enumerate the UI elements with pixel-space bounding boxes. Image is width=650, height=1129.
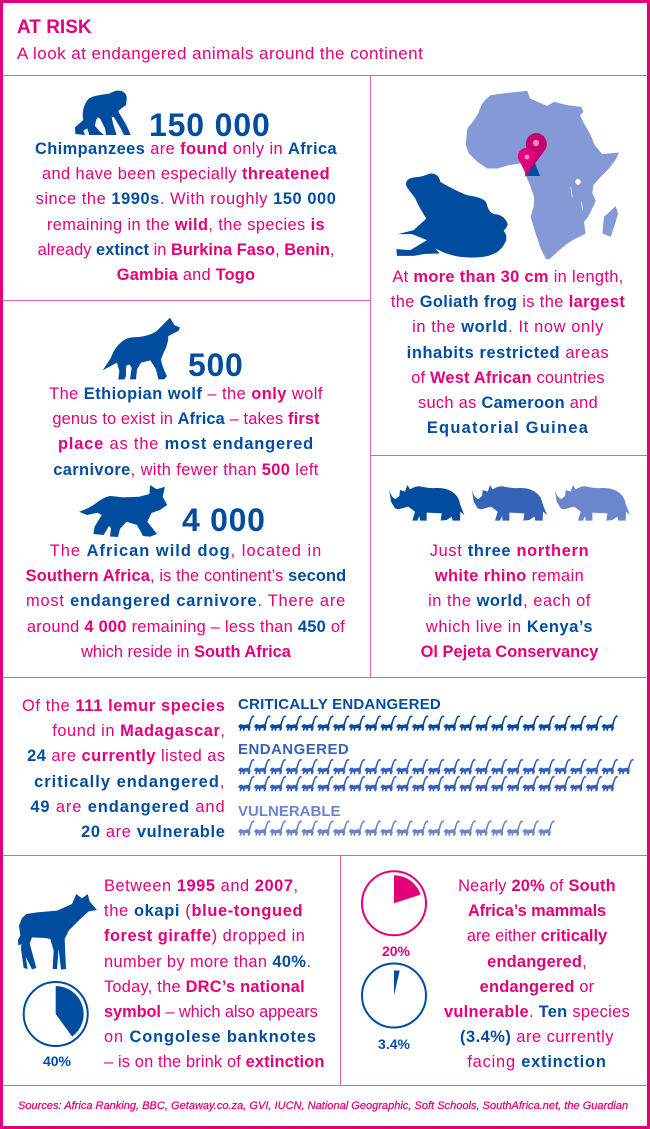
text: African wild dog: Southern Africa, is the continent’s second <box>26 567 346 585</box>
text: rhino: in the world, each of <box>428 592 591 610</box>
text: lemurs: Of the 111 lemur species <box>22 697 226 715</box>
text: mammals: Africa’s mammals <box>468 902 606 920</box>
text: Goliath frog: Equatorial Guinea <box>427 419 589 437</box>
text: okapi: symbol – which also appears <box>104 1003 318 1021</box>
text: lemurs: 20 are vulnerable <box>81 823 226 841</box>
panel: Goliath frog <box>391 90 625 437</box>
text: okapi: on Congolese banknotes <box>104 1028 317 1046</box>
pictogram: 24 critically endangered lemurs <box>238 715 618 731</box>
text: rhino: Ol Pejeta Conservancy <box>421 643 598 661</box>
text: mammals: are either critically <box>467 927 607 945</box>
text: mammals: endangered or <box>480 978 594 996</box>
panel: lemurs <box>22 696 634 841</box>
pictogram: 49 endangered lemurs <box>238 759 634 791</box>
label: critically endangered: CRITICALLY ENDANGERED <box>238 696 441 713</box>
panel: okapi <box>18 877 325 1071</box>
text: rhino: white rhino remain <box>435 567 584 585</box>
text: chimpanzees: and have been especially threatened <box>42 165 330 183</box>
text: African wild dog: which reside in South Africa <box>81 643 291 661</box>
text: chimpanzees: Chimpanzees are found only in Africa <box>35 140 337 158</box>
text: African wild dog <box>26 542 346 661</box>
stat: 4 000: 4 000 <box>182 502 266 538</box>
chart: 20% pie <box>361 870 427 936</box>
text: Goliath frog <box>391 268 625 437</box>
panel: wolves and wild dogs <box>26 318 346 661</box>
panel: chimpanzees <box>35 90 337 284</box>
icon: Goliath frog <box>396 174 508 258</box>
text: okapi: number by more than 40%. <box>104 953 311 971</box>
legend: lemur icon rows <box>238 715 634 836</box>
map: Africa <box>466 90 619 260</box>
text: chimpanzees: already extinct in Burkina Faso, Benin, <box>38 241 334 259</box>
subtitle: A look at endangered animals around the continent <box>17 44 423 63</box>
text: African wild dog: The African wild dog, located in <box>50 542 322 560</box>
chart: 3.4% pie <box>361 962 427 1028</box>
label: vulnerable: VULNERABLE <box>238 803 341 820</box>
text: lemurs: found in Madagascar, <box>52 722 226 740</box>
text: Goliath frog: of West African countries <box>411 369 605 387</box>
text: mammals: (3.4%) are currently <box>460 1028 614 1046</box>
text: chimpanzees <box>35 140 337 284</box>
text: lemurs: 24 are currently listed as <box>27 747 226 765</box>
text: okapi <box>104 877 325 1071</box>
text: lemurs: critically endangered, <box>34 773 226 791</box>
text: Ethiopian wolf <box>49 385 323 479</box>
stat: 500: 500 <box>188 347 244 383</box>
label: 3.4%: 3.4% <box>378 1036 410 1052</box>
text: Goliath frog: the Goliath frog is the largest <box>391 293 625 311</box>
chart: 40% pie <box>22 981 89 1047</box>
text: Goliath frog: inhabits restricted areas <box>407 344 609 362</box>
text: rhino <box>421 542 598 661</box>
text: mammals: vulnerable. Ten species <box>444 1003 630 1021</box>
icons: three rhinos <box>389 485 630 521</box>
text: Ethiopian wolf: place as the most endangered <box>58 435 314 453</box>
text: okapi: Today, the DRC’s national <box>104 978 305 996</box>
text: mammals: Nearly 20% of South <box>458 877 616 895</box>
icon: map pins <box>518 133 547 177</box>
text: African wild dog: around 4 000 remaining – less than 450 of <box>27 618 345 636</box>
text: mammals <box>444 877 630 1071</box>
panel: northern white rhino <box>389 485 630 661</box>
text: lemurs: 49 are endangered and <box>30 798 226 816</box>
text: okapi: the okapi (blue-tongued <box>104 902 303 920</box>
sources: Sources: Africa Ranking, BBC, Getaway.co.za, GVI, IUCN, National Geographic, Soft Schools, SouthAfrica.net, the Guardian <box>18 1100 628 1112</box>
text: Goliath frog: At more than 30 cm in length, <box>392 268 624 286</box>
text: Goliath frog: in the world. It now only <box>412 318 604 336</box>
header <box>17 17 423 63</box>
text: mammals: facing extinction <box>467 1053 607 1071</box>
panel: South African mammals <box>361 870 630 1071</box>
icon: Ethiopian wolf <box>102 318 180 380</box>
text: Ethiopian wolf: The Ethiopian wolf – the only wolf <box>49 385 323 403</box>
text: African wild dog: most endangered carnivore. There are <box>26 592 346 610</box>
text: rhino: which live in Kenya’s <box>426 618 593 636</box>
pictogram: 20 vulnerable lemurs <box>238 820 555 836</box>
text: chimpanzees: since the 1990s. With roughly 150 000 <box>36 190 336 208</box>
label: 40%: 40% <box>43 1053 71 1069</box>
text: chimpanzees: remaining in the wild, the species is <box>47 216 325 234</box>
icon: Cameroon marker <box>526 163 540 176</box>
text: Goliath frog: such as Cameroon and <box>418 394 598 412</box>
text: rhino: Just three northern <box>430 542 589 560</box>
text: chimpanzees: Gambia and Togo <box>117 266 255 284</box>
text: lemurs <box>22 697 226 841</box>
icon: African wild dog <box>79 485 168 537</box>
stat: 150 000: 150 000 <box>149 107 271 143</box>
text: okapi: – is on the brink of extinction <box>104 1053 325 1071</box>
label: 20%: 20% <box>382 943 410 959</box>
text: Ethiopian wolf: genus to exist in Africa – takes first <box>52 410 320 428</box>
icon: chimpanzee <box>75 90 131 135</box>
icon: okapi <box>18 894 97 970</box>
text: okapi: Between 1995 and 2007, <box>104 877 299 895</box>
text: okapi: forest giraffe) dropped in <box>104 927 305 945</box>
title: AT RISK <box>17 17 92 38</box>
text: Ethiopian wolf: carnivore, with fewer than 500 left <box>53 461 319 479</box>
label: endangered: ENDANGERED <box>238 741 349 758</box>
text: mammals: endangered, <box>487 953 587 971</box>
